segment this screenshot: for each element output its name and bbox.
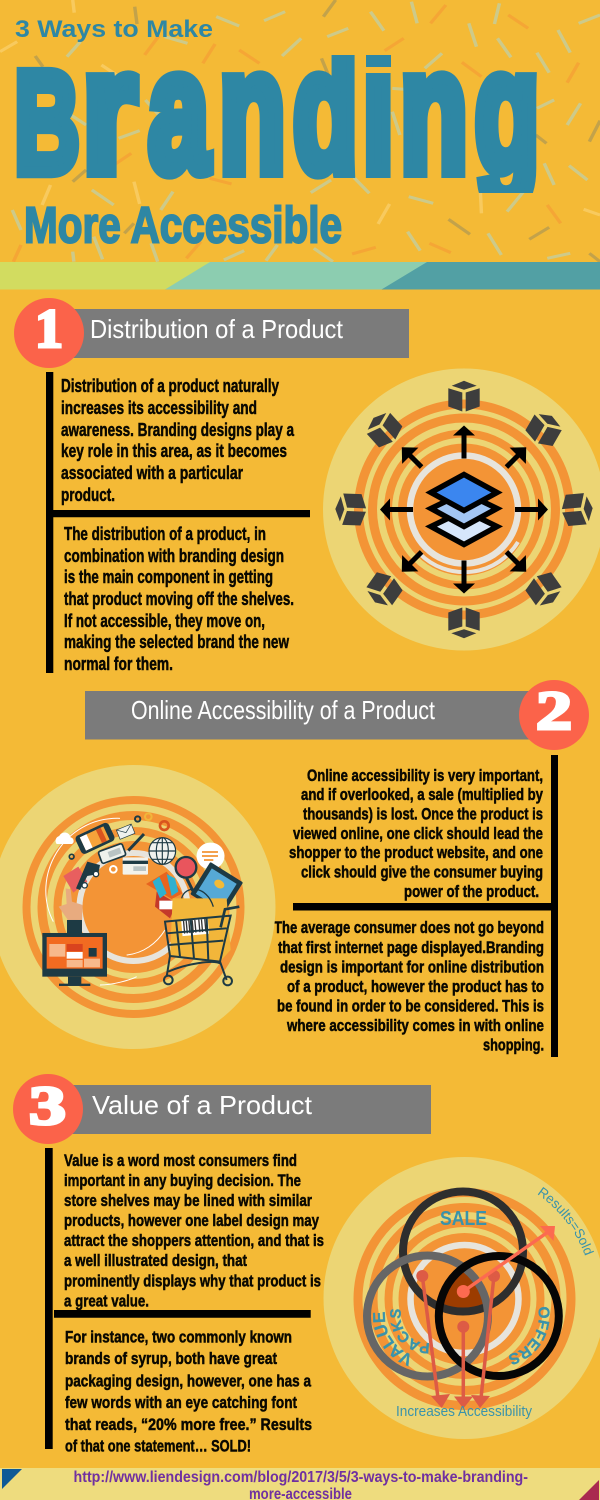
section 3 paragraph 2 xyxy=(65,1328,312,1456)
icon: pointing hand xyxy=(59,888,83,935)
section 1 paragraph 1: increases its accessibility and xyxy=(61,398,257,418)
section 1 paragraph 2: making the selected brand the new xyxy=(64,632,290,652)
circle: value packs xyxy=(367,1256,488,1376)
label: Increases Accessibility: Increases Accessibility xyxy=(396,1403,532,1420)
section 3 paragraph 1: products, however one label design may xyxy=(64,1211,319,1230)
title: Branding: n xyxy=(400,14,468,208)
header bar 3 xyxy=(60,1085,431,1134)
icon: shopping bag xyxy=(170,889,231,962)
corner triangle: blue xyxy=(2,1469,22,1489)
section 2 paragraph 2: shopping. xyxy=(483,1036,544,1054)
source URL: http://www.liendesign.com/blog/2017/3/5/3-ways-to-make-branding- xyxy=(74,1469,528,1486)
icon: globe xyxy=(149,838,176,864)
path: value label baseline xyxy=(385,1304,414,1356)
section 3 header xyxy=(13,1074,431,1144)
section 3 paragraph 1: a well illustrated design, that xyxy=(64,1251,247,1270)
number 3: 3 xyxy=(29,1075,66,1136)
illustration: value venn diagram xyxy=(324,1157,600,1439)
icon: delivery truck xyxy=(63,862,100,893)
number badge 1 xyxy=(14,298,84,368)
number 2: 2 xyxy=(536,680,572,741)
section 1 paragraph 1: awareness. Branding designs play a xyxy=(61,420,295,440)
section 3 paragraph 2: brands of syrup, both have great xyxy=(65,1349,277,1368)
icon: price tag xyxy=(98,843,126,864)
header bar 1 xyxy=(60,309,409,358)
icon: barcode xyxy=(181,917,209,936)
title: Branding: n xyxy=(219,14,286,208)
section 1 paragraph 2: If not accessible, they move on, xyxy=(64,611,265,631)
section 1 paragraph 1: key role in this area, as it becomes xyxy=(61,441,287,461)
icon: boxes around the ring xyxy=(335,381,594,638)
icon: envelope xyxy=(116,824,135,839)
title: Branding: B xyxy=(14,42,80,204)
section 1 paragraph 1: associated with a particular xyxy=(61,463,243,483)
icon: shopping cart xyxy=(164,907,239,985)
icon: stacked layers xyxy=(431,474,497,544)
section 1 paragraph 2: is the main component in getting xyxy=(64,567,273,587)
section 2 paragraph 1: Online accessibility is very important, xyxy=(307,767,543,785)
number 1: 1 xyxy=(35,298,63,359)
corner triangle: red xyxy=(579,1480,599,1500)
label: Results=Sold: Results=Sold xyxy=(538,1187,594,1256)
section 2 paragraph 1: click should give the consumer buying xyxy=(301,864,543,882)
section 2 paragraph 2: of a product, however the product has to xyxy=(287,978,544,996)
section 2 paragraph 2 xyxy=(274,919,544,1054)
header bar 2 xyxy=(85,691,545,740)
section 3 paragraph 2: few words with an eye catching font xyxy=(65,1393,297,1412)
section 2 paragraph 1: shopper to the product website, and one xyxy=(289,844,543,862)
section 3 paragraph 1: a great value. xyxy=(64,1292,149,1310)
icon: credit card xyxy=(123,857,148,875)
motion arcs xyxy=(46,818,165,985)
section 1 paragraph 1: Distribution of a product naturally xyxy=(61,376,279,396)
path: results label baseline xyxy=(537,1194,588,1265)
label: PACKS: PACKS xyxy=(390,1309,429,1354)
title: Branding: r xyxy=(82,15,136,209)
section 1 paragraph 2: combination with branding design xyxy=(64,546,284,566)
title: Branding: i xyxy=(362,15,394,209)
source URL xyxy=(74,1469,528,1500)
title: Branding: a xyxy=(148,13,210,208)
colour band xyxy=(0,262,600,290)
section title 3: Value of a Product xyxy=(92,1090,313,1120)
section 2 paragraph 1: thousands) is lost. Once the product is xyxy=(303,806,543,824)
section 1 divider lines xyxy=(46,372,310,673)
section 1 paragraph 1 xyxy=(61,376,295,505)
section 2 paragraph 2: design is important for online distribution xyxy=(280,958,544,976)
label: OFFERS: OFFERS xyxy=(509,1306,550,1364)
section 2 header xyxy=(85,680,589,750)
section 3 paragraph 2: that reads, “20% more free.” Results xyxy=(65,1415,312,1434)
section 2 paragraph 1: and if overlooked, a sale (multiplied by xyxy=(301,786,544,804)
icon: outward arrows xyxy=(380,426,548,594)
heading: 3 Ways to Make: 3 Ways to Make xyxy=(15,16,213,43)
section 1 paragraph 1: product. xyxy=(61,485,115,505)
section 2 divider lines xyxy=(293,755,558,1057)
illustration: online shopping xyxy=(0,765,276,1049)
section 1 paragraph 2: normal for them. xyxy=(64,654,173,674)
section 3 paragraph 1: prominently displays why that product is xyxy=(64,1272,321,1290)
section 3 paragraph 1: attract the shoppers attention, and that is xyxy=(64,1231,324,1250)
icon: speech bubble xyxy=(197,843,225,874)
section 3 divider lines xyxy=(45,1148,311,1449)
overlap of the three circles xyxy=(444,1272,483,1308)
icon: gears xyxy=(69,813,169,873)
title: Branding: g xyxy=(475,14,539,208)
arrows: increases accessibility xyxy=(416,1270,500,1408)
icon: signal pen xyxy=(128,834,144,851)
circle: offers xyxy=(439,1256,559,1376)
section 1 header xyxy=(14,298,409,368)
section 3 paragraph 2: For instance, two commonly known xyxy=(65,1328,292,1346)
section 3 paragraph 1: Value is a word most consumers find xyxy=(64,1151,297,1170)
section 2 paragraph 1 xyxy=(289,767,544,901)
section 1 paragraph 2: that product moving off the shelves. xyxy=(64,589,294,609)
label: VALUE: VALUE xyxy=(372,1312,410,1366)
heading: More Accessible: More Accessible xyxy=(24,196,342,254)
number badge 2 xyxy=(519,680,589,750)
section 3 paragraph 1: store shelves may be lined with similar xyxy=(64,1191,312,1210)
icon: tablet xyxy=(190,862,243,915)
footer band xyxy=(0,1468,600,1500)
arrow: results xyxy=(457,1226,555,1298)
icon: computer monitor xyxy=(42,933,107,986)
section 3 paragraph 1 xyxy=(64,1151,324,1310)
path: packs label baseline xyxy=(401,1300,430,1343)
section 3 paragraph 2: of that one statement… SOLD! xyxy=(65,1436,251,1456)
circle: sale xyxy=(403,1192,523,1312)
icon: storefront xyxy=(146,872,183,918)
label: SALE: SALE xyxy=(440,1208,487,1230)
section 1 paragraph 2 xyxy=(64,524,294,674)
icon: cloud xyxy=(56,833,74,844)
title: Branding xyxy=(16,55,537,193)
section 2 paragraph 2: where accessibility comes in with online xyxy=(286,1017,544,1035)
section 3 paragraph 1: important in any buying decision. The xyxy=(64,1171,301,1190)
title: Branding: d xyxy=(293,14,358,208)
icon: magnifier xyxy=(176,857,196,892)
section 2 paragraph 1: power of the product. xyxy=(404,883,539,901)
header confetti pattern xyxy=(0,0,600,262)
section title 2: Online Accessibility of a Product xyxy=(131,695,436,725)
section 3 paragraph 2: packaging design, however, one has a xyxy=(65,1372,311,1390)
section 2 paragraph 1: viewed online, one click should lead the xyxy=(293,825,543,843)
section 2 paragraph 2: that first internet page displayed.Branding xyxy=(278,939,544,957)
number badge 3 xyxy=(13,1074,83,1144)
icon: smartphone xyxy=(74,822,116,855)
illustration: distribution rings xyxy=(323,368,600,650)
path: offers label baseline xyxy=(502,1307,539,1356)
section title 1: Distribution of a Product xyxy=(90,314,344,344)
section 1 paragraph 2: The distribution of a product, in xyxy=(64,524,266,544)
